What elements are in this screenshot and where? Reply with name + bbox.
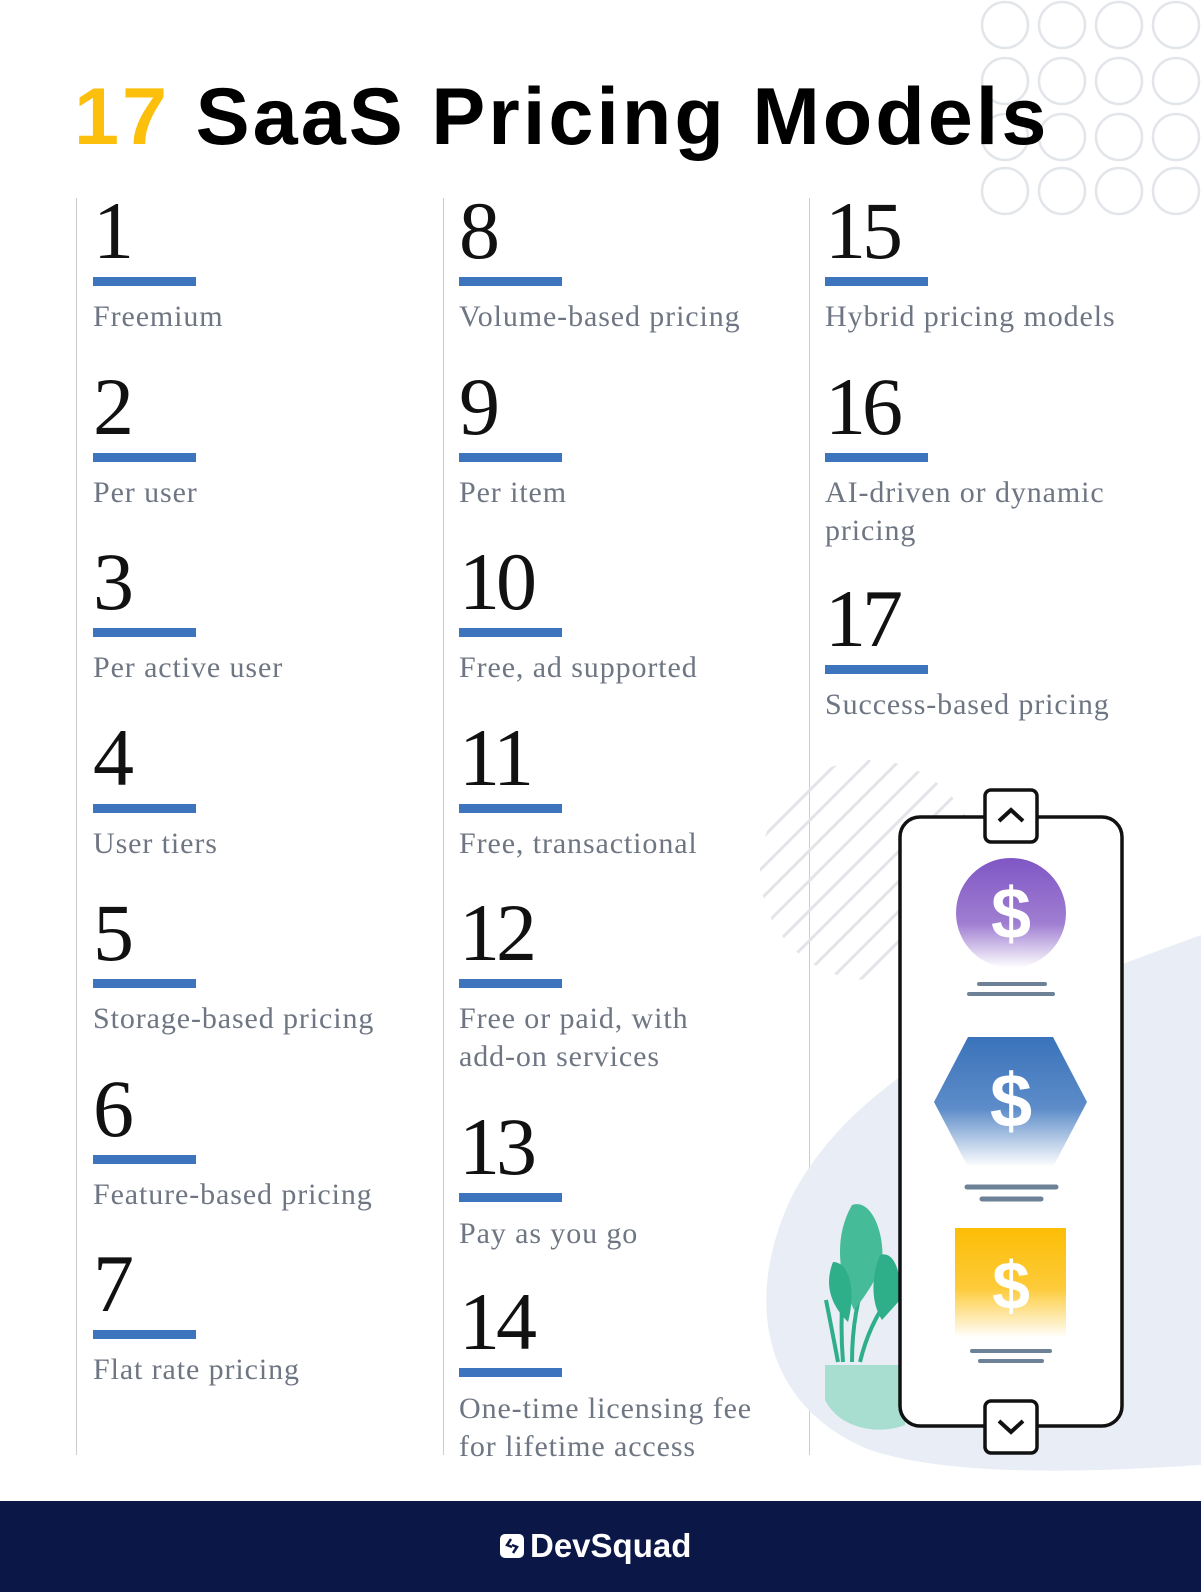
column 1 items: Per user: [93, 476, 198, 509]
yellow square plan: $: [992, 1248, 1030, 1324]
column 2 items: for lifetime access: [459, 1430, 696, 1463]
column 2 items: 8: [459, 185, 496, 276]
column 2 items: Free, transactional: [459, 827, 698, 860]
purple circle plan: $: [991, 874, 1031, 954]
phone frame: [900, 817, 1122, 1426]
up button: [985, 790, 1037, 842]
column 1 items: 4: [93, 712, 130, 803]
column 1 items: User tiers: [93, 827, 218, 860]
column 1 items: Per active user: [93, 651, 283, 684]
column 1 items: Feature-based pricing: [93, 1178, 373, 1211]
icon: logo mark: [500, 1534, 524, 1558]
column 1 items: 6: [93, 1063, 130, 1154]
column 3 items: Success-based pricing: [825, 688, 1110, 721]
column 2 items: Volume-based pricing: [459, 300, 741, 333]
column 2 items: 10: [459, 536, 533, 627]
down button: [985, 1401, 1037, 1453]
column 3 items: AI-driven or dynamic: [825, 476, 1105, 509]
column 2 items: [459, 185, 752, 1463]
column 2 items: Free, ad supported: [459, 651, 698, 684]
column 2 items: 9: [459, 361, 496, 452]
column 1 items: 7: [93, 1238, 130, 1329]
column 1 items: Freemium: [93, 300, 224, 333]
yellow square plan: [955, 1228, 1066, 1361]
column 3 items: 17: [825, 573, 899, 664]
illustration: pricing slider: [760, 760, 1201, 1471]
decorative circles grid: [980, 0, 1200, 216]
column 1 items: 5: [93, 887, 130, 978]
hatch pattern: [760, 760, 966, 980]
column 2 items: 12: [459, 887, 533, 978]
column 2 items: Per item: [459, 476, 567, 509]
column 3 items: 15: [825, 185, 899, 276]
column 1 items: Flat rate pricing: [93, 1353, 300, 1386]
title: 17 SaaS Pricing Models: [74, 72, 1049, 162]
column 3 items: pricing: [825, 514, 916, 547]
column 2 items: 11: [459, 712, 530, 803]
blue hexagon plan: $: [990, 1059, 1032, 1144]
footer: [0, 1501, 1201, 1592]
column 1 items: Storage-based pricing: [93, 1002, 374, 1035]
logo: DevSquad: [530, 1527, 691, 1564]
column 3 items: Hybrid pricing models: [825, 300, 1116, 333]
column 1 items: [93, 185, 374, 1386]
column 3 items: 16: [825, 361, 899, 452]
column 2 items: Free or paid, with: [459, 1002, 688, 1035]
purple circle plan: [956, 858, 1066, 994]
column 2 items: 13: [459, 1101, 533, 1192]
background blob: [766, 935, 1201, 1471]
column 1 items: 2: [93, 361, 130, 452]
column 2 items: Pay as you go: [459, 1217, 638, 1250]
column 2 items: 14: [459, 1276, 533, 1367]
column 1 items: 3: [93, 536, 130, 627]
column 2 items: One-time licensing fee: [459, 1392, 752, 1425]
column 3 items: [825, 185, 1116, 721]
column 2 items: add-on services: [459, 1040, 660, 1073]
plant: [825, 1204, 905, 1430]
column 1 items: 1: [93, 185, 130, 276]
blue hexagon plan: [934, 1037, 1087, 1199]
